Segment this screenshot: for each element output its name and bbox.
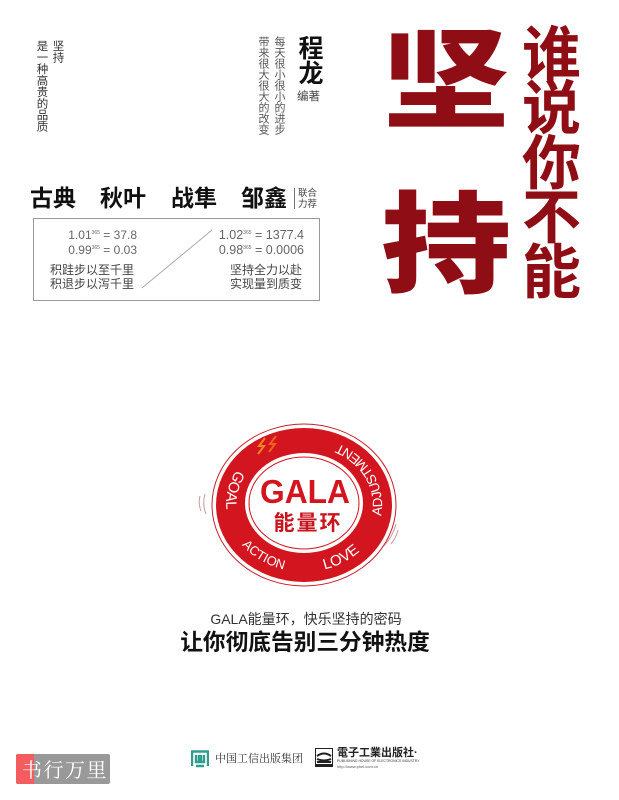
right caption: 实现量到质变 <box>230 277 302 291</box>
vertical slogan: 是一种高贵的品质: 是一种高贵的品质 <box>36 40 48 132</box>
right caption: 坚持全力以赴 <box>230 263 302 277</box>
main title: 坚持 <box>381 0 511 316</box>
subtitle: 谁说你不能: 不 <box>522 170 581 255</box>
GALA energy ring badge: ACTION <box>242 541 286 570</box>
icon: teal maze mark <box>191 750 209 768</box>
publisher logo: 电子工业出版社 <box>315 746 420 769</box>
publisher logo: 中国工信出版集团: 中国工信出版集团 <box>215 750 303 766</box>
left caption <box>50 263 134 291</box>
main title: 坚持: 持 <box>381 156 511 316</box>
recommendation note: 联合力荐: 联合 <box>298 188 317 199</box>
GALA energy ring badge: 能量环 <box>274 507 342 537</box>
promo headline: 让你彻底告别三分钟热度 <box>180 629 430 655</box>
recommenders: 邹鑫 <box>241 185 287 211</box>
right caption <box>230 263 302 291</box>
GALA energy ring badge: GOAL <box>226 472 244 510</box>
author role: 编著: 编著 <box>297 91 320 103</box>
publisher logo: 电子工业出版社: 電子工業出版社· <box>337 747 418 759</box>
subtitle: 谁说你不能: 谁 <box>522 7 581 92</box>
promo line: GALA能量环，快乐坚持的密码 <box>210 611 402 627</box>
recommenders <box>30 185 287 211</box>
formula box <box>33 218 320 301</box>
vertical tagline: 每天很小很小的进步: 每天很小很小的进步 <box>273 36 285 135</box>
subtitle: 谁说你不能: 说 <box>522 61 581 146</box>
recommenders: 秋叶 <box>100 185 146 211</box>
vertical tagline: 带来很大很大的改变: 带来很大很大的改变 <box>257 36 269 135</box>
recommendation note: 联合力荐: 力荐 <box>298 199 317 210</box>
left caption: 积跬步以至千里 <box>50 263 134 277</box>
GALA energy ring badge: LOVE <box>322 544 360 570</box>
subtitle: 谁说你不能: 能 <box>522 225 581 310</box>
left formulas: 1.01365 = 37.8 <box>68 228 137 242</box>
watermark: 书行万里: 书行万里 <box>22 754 108 783</box>
publisher logo: 电子工业出版社: http://www.phei.com.cn <box>337 764 378 769</box>
recommenders: 古典 <box>30 185 76 211</box>
right formulas <box>219 228 304 256</box>
diagonal divider line <box>142 230 212 288</box>
left formulas: 0.99365 = 0.03 <box>68 242 137 256</box>
left formulas <box>68 228 137 256</box>
subtitle: 谁说你不能 <box>522 7 581 310</box>
recommendation note: 联合力荐 <box>294 188 318 209</box>
GALA energy ring badge: GALA <box>260 473 350 510</box>
author name: 程龙: 程龙 <box>295 35 323 85</box>
icon: publisher seal <box>315 748 333 767</box>
publisher logo: 电子工业出版社: PUBLISHING HOUSE OF ELECTRONICS INDUSTRY <box>337 759 419 763</box>
left caption: 积退步以泻千里 <box>50 277 134 291</box>
right formulas: 0.98365 = 0.0006 <box>219 242 304 256</box>
GALA energy ring badge: ADJUSTMENT <box>334 445 382 516</box>
recommenders: 战隼 <box>171 185 217 211</box>
subtitle: 谁说你不能: 你 <box>522 116 581 201</box>
vertical slogan: 坚持: 坚持 <box>52 40 64 63</box>
right formulas: 1.02365 = 1377.4 <box>219 228 304 242</box>
